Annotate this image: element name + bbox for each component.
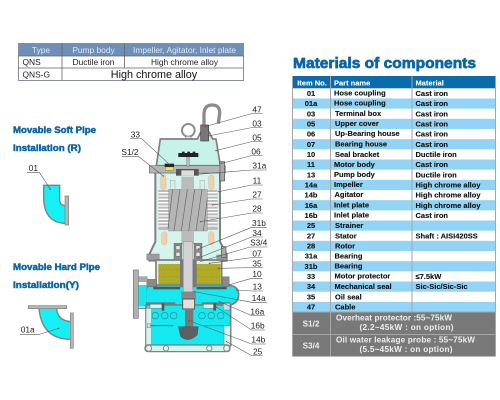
terminals [178, 152, 198, 166]
row texts: Bearing [334, 251, 363, 260]
row texts: Inlet plate [334, 211, 369, 220]
heading: Movable Hard Pipe: Movable Hard Pipe [13, 262, 100, 273]
row texts: 06 [307, 130, 315, 139]
row texts: 27 [307, 231, 315, 240]
note S3/4 [303, 336, 475, 354]
cable [204, 105, 220, 126]
row texts: Hose coupling [334, 88, 386, 98]
type table: QNS [22, 57, 41, 67]
note S3/4: S3/4 [303, 342, 320, 350]
part number labels: 14a [252, 293, 266, 303]
row texts: High chrome alloy [416, 191, 481, 200]
inlet plate [146, 302, 230, 328]
row texts: Stator [335, 231, 357, 240]
shaft upper [181, 177, 194, 189]
rotor [168, 189, 207, 231]
row texts: 47 [307, 302, 315, 312]
part number labels: 35 [252, 258, 262, 268]
row texts: 03 [307, 109, 315, 118]
row texts: Terminal box [335, 109, 382, 118]
pipe elbow 01: 01 [29, 163, 38, 173]
type table: Type [32, 45, 50, 55]
row texts: Cast iron [416, 140, 448, 149]
heading: Movable Soft Pipe: Installation (R) [13, 143, 81, 154]
row texts: 01a [305, 99, 318, 108]
type table: Impeller, Agitator, Inlet plate [133, 45, 236, 55]
row texts: Ductile iron [416, 170, 457, 179]
strainer [145, 308, 230, 352]
stator [158, 190, 218, 230]
part number labels: S1/2 [121, 147, 139, 157]
row texts: Cast iron [416, 130, 448, 139]
row texts: Oil seal [335, 292, 362, 301]
motor protector 33 [165, 164, 174, 170]
terminal box [201, 125, 209, 141]
row texts: Upper cover [335, 119, 379, 128]
pipe elbow 01 [27, 163, 69, 225]
part number labels [121, 104, 268, 356]
part number labels: 07 [252, 248, 262, 258]
alternating rows [292, 98, 496, 312]
row texts: 13 [307, 170, 315, 179]
note S3/4: (5.5~45kW : on option) [360, 345, 453, 354]
materials table [292, 76, 496, 356]
table header [292, 76, 496, 88]
eye bolt [182, 124, 195, 147]
row texts: 31b [305, 262, 318, 271]
part number labels: 47 [252, 104, 262, 114]
row texts: 16a [305, 201, 318, 210]
row texts: Cast iron [416, 109, 448, 118]
table header: Material [416, 78, 444, 88]
row texts: ≤7.5kW [416, 272, 442, 281]
heading: Movable Hard Pipe: Installation(Y) [13, 280, 79, 291]
motor body [149, 172, 227, 261]
central shaft and seals [180, 242, 197, 299]
row texts: Shaft : AISI420SS [416, 231, 478, 240]
row texts: Agitator [334, 190, 363, 199]
table header: Item No. [297, 78, 327, 88]
row texts: Up-Bearing house [335, 129, 400, 138]
oil chamber [156, 260, 222, 288]
part number labels: 31b [252, 218, 266, 228]
leader lines [122, 114, 267, 356]
note S1/2: (2.2~45kW : on option) [360, 323, 454, 332]
heading: Movable Soft Pipe [13, 125, 96, 154]
note S1/2: S1/2 [303, 320, 320, 328]
gray notes rows [292, 312, 496, 356]
row texts: Strainer [335, 221, 363, 230]
row texts: 16b [305, 211, 318, 220]
red part markers [163, 126, 237, 342]
part number labels: 28 [252, 204, 262, 214]
flange blocks [147, 254, 227, 260]
row texts: Seal bracket [335, 150, 380, 159]
note S1/2 [303, 314, 454, 332]
row texts: 31a [305, 252, 318, 261]
row texts: Rotor [335, 242, 355, 250]
part number labels: 10 [252, 269, 262, 279]
row texts: Ductile iron [416, 150, 457, 159]
part number labels: 14b [251, 335, 266, 345]
note S3/4: Oil water leakage probe : 55~75kW [336, 336, 475, 344]
part number labels: 27 [252, 190, 262, 200]
upper flange [149, 166, 225, 173]
row texts: Cast iron [416, 99, 448, 108]
pipe elbow 01a [20, 306, 73, 348]
row texts: High chrome alloy [416, 180, 481, 190]
oil fill yellow [158, 264, 221, 286]
row texts: 05 [307, 120, 315, 128]
impeller hub [183, 299, 195, 309]
row texts: 25 [307, 221, 315, 230]
note S1/2: Overheat protector :55~75kW [336, 314, 452, 322]
part number labels: 05 [252, 132, 262, 142]
type table: QNS-G [22, 70, 50, 80]
row texts: 01 [307, 89, 315, 98]
part number labels: 33 [131, 129, 140, 139]
row texts: 14a [305, 180, 318, 190]
row texts: Cable [335, 302, 355, 312]
row texts: Mechanical seal [334, 282, 392, 291]
pipe elbow 01a: 01a [21, 324, 35, 334]
row texts: Sic-Sic/Sic-Sic [416, 282, 468, 291]
row texts: Cast iron [416, 89, 448, 98]
type table: Pump body [72, 45, 115, 55]
type table: Ductile iron [73, 57, 115, 67]
row texts: Inlet plate [334, 200, 369, 209]
lower chamber [146, 305, 231, 346]
bearing house 31b [174, 243, 202, 260]
pump cross-section diagram [121, 104, 268, 356]
part number labels: 16b [251, 321, 265, 331]
row texts: 10 [307, 150, 315, 159]
row texts: Cast iron [416, 160, 448, 169]
row texts: 33 [307, 272, 315, 281]
row texts: 11 [307, 160, 315, 169]
part number labels: 11 [253, 176, 262, 186]
row texts: Motor protector [334, 272, 390, 281]
row texts: Bearing house [335, 139, 387, 148]
part number labels: 16a [250, 306, 265, 316]
row texts [305, 88, 481, 312]
row texts: Cast iron [416, 211, 448, 220]
row texts: Cast iron [416, 120, 448, 128]
row texts: Hose coupling [334, 99, 386, 108]
row texts: 35 [307, 292, 315, 301]
row texts: High chrome alloy [416, 201, 481, 210]
outlet flange [133, 270, 147, 318]
part number labels: 06 [251, 146, 261, 156]
oil chamber base bars [153, 287, 227, 289]
row texts: Pump body [334, 170, 376, 179]
type table [18, 43, 244, 81]
part number labels: 13 [253, 282, 262, 292]
coil ends [161, 175, 214, 245]
bearing seat [176, 169, 199, 176]
type table: High chrome alloy [151, 57, 219, 67]
row texts: 34 [307, 282, 316, 291]
table header: Part name [334, 78, 370, 88]
row texts: 14b [305, 191, 318, 200]
row texts: 28 [307, 242, 315, 250]
part number labels: 25 [253, 346, 263, 356]
upper cover [156, 132, 220, 166]
row texts: Motor body [334, 160, 376, 169]
row texts: Impeller [334, 180, 363, 189]
agitator 14b [178, 327, 198, 340]
part number labels: 31a [252, 160, 267, 170]
heading: Materials of components: Materials of components [293, 55, 476, 72]
heading: Movable Soft Pipe: Movable Soft Pipe [13, 125, 96, 136]
part number labels: S3/4 [250, 238, 268, 248]
row texts: Bearing [334, 262, 363, 270]
heading: Movable Hard Pipe [13, 262, 100, 291]
part number labels: 03 [252, 118, 262, 128]
volute [146, 285, 239, 308]
type table: High chrome alloy [111, 69, 198, 81]
row texts: 07 [307, 140, 315, 149]
part number labels: 34 [252, 228, 262, 238]
